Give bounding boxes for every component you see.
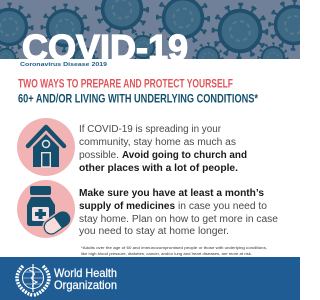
logo text: World Health Organization: Organization [54,278,117,292]
icon: house [17,118,75,176]
footnote: *Adults over the age of 60 and immunocompromised people or those with underlying conditions, [81,245,267,250]
header banner with virus pattern [0,0,318,73]
logo text: World Health Organization: World Health [54,266,117,280]
footer band [0,257,300,300]
text: stay home: possible. [79,150,119,161]
text: stay home: If COVID-19 is spreading in your [79,124,222,135]
icon: medicine bottle and capsule [17,180,75,240]
text: medicines: supply of medicines [79,201,175,212]
footnote [81,245,267,256]
text: medicines: you need to stay at home longer. [79,226,229,237]
text: medicines: in case you need to [178,201,267,212]
text: medicines [79,188,278,237]
text: stay home: other places with a lot of people. [79,163,238,174]
logo text: World Health Organization [54,266,117,292]
white content panel [0,59,300,257]
title: COVID-19: COVID-19 [22,27,188,68]
text: medicines: stay home. Plan on how to get more in case [79,214,278,225]
text: stay home: community, stay home as much as [79,137,236,148]
subtitle: Coronavirus Disease 2019: Coronavirus Disease 2019 [20,62,108,68]
text: medicines: Make sure you have at least a month’s [79,188,264,199]
icon: WHO emblem [17,264,49,295]
footnote: like high blood pressure, diabetes, cancer, and/or lung and heart diseases, are more at risk. [81,251,252,256]
text: stay home: Avoid going to church and [122,150,247,161]
text: stay home [79,124,247,174]
